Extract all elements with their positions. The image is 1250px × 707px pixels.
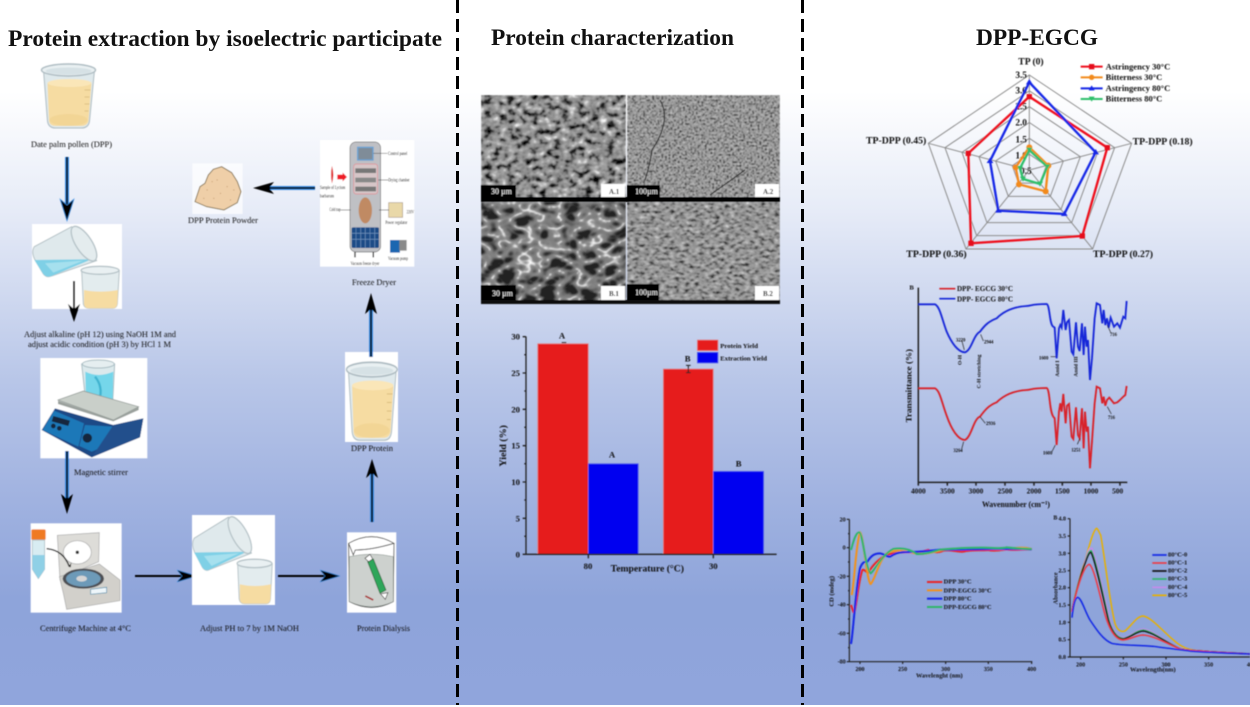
chart: yield bar chart: A xyxy=(609,449,616,459)
chart: FTIR spectra: B xyxy=(909,285,914,292)
chart: circular dichroism: 250 xyxy=(898,667,907,673)
chart: circular dichroism: 0 xyxy=(843,546,846,552)
chart: yield bar chart: Temperature (°C) xyxy=(611,564,684,574)
arrow: centrifuge to pH adjust xyxy=(135,570,197,582)
label: protein dialysis: Protein Dialysis xyxy=(357,623,410,633)
legend: FTIR: DPP- EGCG 30°C xyxy=(957,284,1013,293)
label: adjust alkaline and acidic: adjust acidic condition (pH 3) by HCl 1 M xyxy=(28,339,171,349)
chart: radar astringency and bitterness: TP-DPP (0.45) xyxy=(866,135,926,145)
chart: yield bar chart: 10 xyxy=(511,477,520,487)
arrow: stirrer to centrifuge xyxy=(61,451,73,514)
chart: circular dichroism: 300 xyxy=(941,667,950,673)
legend: radar: Bitterness 80°C xyxy=(1106,95,1162,104)
chart: radar astringency and bitterness: 1.5 xyxy=(1015,135,1027,145)
chart: FTIR spectra: Wavenumber (cm⁻¹) xyxy=(982,499,1050,509)
chart: radar astringency and bitterness: TP-DPP (0.18) xyxy=(1133,137,1193,147)
chart: FTIR spectra: C-H stretching xyxy=(977,354,983,388)
legend: FTIR: DPP- EGCG 80°C xyxy=(957,294,1013,303)
image: SEM A.2: 100µm xyxy=(635,187,659,196)
chart: radar astringency and bitterness: 2.5 xyxy=(1015,102,1027,112)
arrow: inside pouring box xyxy=(68,281,80,322)
legend: radar: Bitterness 30°C xyxy=(1106,73,1162,82)
chart: radar astringency and bitterness: 3.0 xyxy=(1015,86,1027,96)
chart: UV absorbance: Wavelength(nm) xyxy=(1130,667,1176,674)
legend: radar: Astringency 80°C xyxy=(1106,84,1170,93)
legend: CD: DPP-EGCG 80°C xyxy=(944,604,992,611)
image: SEM B.2 xyxy=(627,202,780,304)
arrow: pollen to alkaline xyxy=(60,157,74,221)
chart: yield bar chart: 80 xyxy=(584,561,592,571)
chart: radar astringency and bitterness: TP-DPP (0.36) xyxy=(906,249,967,259)
icon: protein dialysis xyxy=(347,532,396,613)
legend: CD: DPP-EGCG 30°C xyxy=(944,587,992,594)
chart: FTIR spectra xyxy=(904,284,1127,509)
arrow: freeze dryer to powder xyxy=(253,182,315,194)
chart: radar astringency and bitterness: TP-DPP (0.27) xyxy=(1093,249,1153,259)
chart: FTIR spectra: 2500 xyxy=(998,487,1013,496)
chart: yield bar chart: Extraction Yield xyxy=(720,357,768,363)
chart: UV absorbance: 2.0 xyxy=(1059,586,1066,592)
icon: freeze dryer: 220V xyxy=(407,210,414,215)
chart: yield bar chart: A xyxy=(559,331,566,341)
chart: FTIR spectra: 3220 xyxy=(956,338,966,343)
chart: radar astringency and bitterness xyxy=(866,57,1193,259)
chart: FTIR spectra: 3000 xyxy=(969,487,984,496)
chart: yield bar chart: Protein Yield xyxy=(720,344,759,350)
icon: freeze dryer: Vacuum pump xyxy=(388,257,408,262)
arrow: DPP protein to freeze dryer xyxy=(365,293,377,357)
chart: FTIR spectra: O-H xyxy=(958,354,964,365)
chart: yield bar chart: 5 xyxy=(516,513,521,523)
panel: SEM micrographs xyxy=(481,95,780,304)
chart: circular dichroism: 400 xyxy=(1027,667,1036,673)
image: SEM A.1 xyxy=(481,95,626,197)
chart: UV absorbance: 250 xyxy=(1119,662,1128,668)
chart: radar astringency and bitterness: TP (0) xyxy=(1018,57,1044,67)
icon: pouring beakers pH 7 xyxy=(192,513,275,605)
chart: UV absorbance: Absorbance xyxy=(1053,572,1059,604)
chart: circular dichroism: -40 xyxy=(838,603,846,609)
icon: freeze dryer: Vacuum freeze dryer xyxy=(351,262,380,267)
legend: absorbance: 80°C-0 xyxy=(1168,552,1187,559)
image: SEM B.2: B.2 xyxy=(763,290,773,298)
chart: yield bar chart: 30 xyxy=(709,561,718,571)
chart: radar astringency and bitterness: 0.5 xyxy=(1020,167,1032,177)
image: SEM B.2: 100µm xyxy=(635,288,659,297)
legend: absorbance: 80°C-2 xyxy=(1168,568,1187,575)
chart: FTIR spectra: 2000 xyxy=(1027,487,1042,496)
label: protein powder: DPP Protein Powder xyxy=(188,215,258,225)
icon: protein powder xyxy=(192,163,243,214)
label: adjust alkaline and acidic: Adjust alkaline (pH 12) using NaOH 1M and xyxy=(24,329,177,339)
chart: UV absorbance: B xyxy=(1053,516,1057,522)
icon: magnetic stirrer xyxy=(40,358,147,458)
legend: CD xyxy=(927,579,992,611)
chart: UV absorbance: 3.5 xyxy=(1059,534,1066,540)
image: SEM A.2: A.2 xyxy=(763,188,774,196)
chart: FTIR spectra: 500 xyxy=(1112,487,1123,496)
chart: UV absorbance: 350 xyxy=(1204,662,1213,668)
chart: yield bar chart: B xyxy=(685,353,691,363)
legend: CD: DPP 30°C xyxy=(944,579,972,586)
chart: UV absorbance: 1.0 xyxy=(1059,620,1066,626)
chart: FTIR spectra: 716 xyxy=(1110,333,1118,338)
chart: yield bar chart: Yield (%) xyxy=(498,425,508,467)
chart: radar astringency and bitterness: 2.0 xyxy=(1015,119,1027,129)
chart: FTIR spectra: 1500 xyxy=(1055,487,1070,496)
icon: freeze dryer: Drying chamber xyxy=(388,179,410,184)
label: date palm pollen: Date palm pollen (DPP) xyxy=(31,139,112,149)
chart: FTIR spectra: Amid III xyxy=(1073,356,1079,377)
chart: UV absorbance: 300 xyxy=(1161,662,1170,668)
title: DPP-EGCG: DPP-EGCG xyxy=(976,25,1098,51)
icon: freeze dryer: Control panel xyxy=(388,152,408,157)
section dividers xyxy=(458,0,802,705)
image: SEM B.1: 30 µm xyxy=(492,289,514,298)
chart: FTIR spectra: 3500 xyxy=(940,487,955,496)
arrow: pH adjust to dialysis xyxy=(278,570,340,582)
chart: UV absorbance: 0.0 xyxy=(1059,655,1066,661)
chart: circular dichroism: -80 xyxy=(838,660,846,666)
legend: radar xyxy=(1081,62,1170,104)
chart: circular dichroism xyxy=(828,517,1036,679)
icon: freeze dryer: barbarum xyxy=(320,194,334,199)
chart: UV absorbance: 0.5 xyxy=(1059,638,1066,644)
chart: circular dichroism: -60 xyxy=(838,631,846,637)
chart: FTIR spectra: 716 xyxy=(1108,416,1116,421)
legend: absorbance xyxy=(1152,552,1187,599)
icon: DPP protein beaker xyxy=(345,352,398,442)
chart: circular dichroism: 200 xyxy=(856,667,864,673)
chart: yield bar chart: 0 xyxy=(516,549,520,559)
legend: absorbance: 80°C-4 xyxy=(1168,584,1187,591)
chart: FTIR spectra: 2936 xyxy=(986,422,996,427)
chart: FTIR spectra: 1600 xyxy=(1043,452,1053,457)
chart: FTIR spectra: Transmittance (%) xyxy=(904,349,913,422)
chart: yield bar chart: 15 xyxy=(511,441,521,451)
image: SEM A.1: 30 µm xyxy=(491,187,513,196)
image: SEM B.1 xyxy=(481,202,626,304)
chart: FTIR spectra: Amid I xyxy=(1055,361,1061,377)
legend: FTIR xyxy=(939,284,1013,303)
legend: absorbance: 80°C-1 xyxy=(1168,560,1187,567)
chart: FTIR spectra: 4000 xyxy=(911,487,926,496)
chart: radar astringency and bitterness: 1.0 xyxy=(1015,152,1027,162)
arrow: dialysis to DPP protein xyxy=(366,459,378,522)
chart: UV absorbance: 3.0 xyxy=(1059,551,1066,557)
chart: radar astringency and bitterness: 3.5 xyxy=(1015,71,1027,81)
chart: yield bar chart: 25 xyxy=(511,368,521,378)
chart: FTIR spectra: 2944 xyxy=(984,341,994,346)
image: SEM A.1: A.1 xyxy=(609,188,620,196)
chart: UV absorbance: 200 xyxy=(1076,662,1085,668)
title: protein extraction: Protein extraction by isoelectric participate xyxy=(8,26,442,52)
label: centrifuge: Centrifuge Machine at 4°C xyxy=(40,623,131,633)
chart: circular dichroism: CD (mdeg) xyxy=(828,576,835,607)
legend: CD: DPP 80°C xyxy=(944,596,972,603)
icon: freeze dryer xyxy=(320,140,414,267)
chart: circular dichroism: 20 xyxy=(840,517,846,523)
chart: FTIR spectra: 1600 xyxy=(1039,356,1049,361)
icon: date palm pollen beaker xyxy=(42,64,96,128)
icon: freeze dryer: Power regulator xyxy=(385,221,408,226)
chart: UV absorbance xyxy=(1053,516,1250,674)
image: SEM B.1: B.1 xyxy=(609,290,619,298)
chart: FTIR spectra: 3264 xyxy=(953,449,963,454)
chart: circular dichroism: -20 xyxy=(838,574,846,580)
chart: circular dichroism: Wavelenght (nm) xyxy=(916,672,963,679)
label: adjust alkaline and acidic xyxy=(24,329,177,349)
legend: absorbance: 80°C-5 xyxy=(1168,592,1187,599)
label: freeze dryer: Freeze Dryer xyxy=(352,277,396,287)
chart: yield bar chart: B xyxy=(736,459,742,469)
chart: circular dichroism: 350 xyxy=(984,667,993,673)
chart: UV absorbance: 2.5 xyxy=(1059,569,1066,575)
chart: FTIR spectra: 1251 xyxy=(1071,449,1081,454)
legend: absorbance: 80°C-3 xyxy=(1168,576,1187,583)
icon: pouring beakers alkaline xyxy=(32,223,122,309)
image: SEM A.2 xyxy=(627,95,780,197)
icon: freeze dryer: Sample of Lycium xyxy=(320,186,345,191)
icon: centrifuge machine xyxy=(31,523,122,613)
legend: radar: Astringency 30°C xyxy=(1106,62,1170,71)
chart: UV absorbance: 1.5 xyxy=(1059,603,1066,609)
chart: FTIR spectra: 1000 xyxy=(1084,487,1099,496)
chart: yield bar chart: 30 xyxy=(511,332,520,342)
label: magnetic stirrer: Magnetic stirrer xyxy=(74,467,128,477)
chart: yield bar chart: 20 xyxy=(511,404,520,414)
icon: freeze dryer: Cold trap xyxy=(329,208,341,213)
label: adjust pH: Adjust PH to 7 by 1M NaOH xyxy=(200,623,299,633)
label: DPP protein: DPP Protein xyxy=(351,443,394,453)
chart: UV absorbance: 4.0 xyxy=(1059,517,1066,523)
chart: yield bar chart xyxy=(498,331,777,574)
title: protein characterization: Protein characterization xyxy=(491,25,734,51)
